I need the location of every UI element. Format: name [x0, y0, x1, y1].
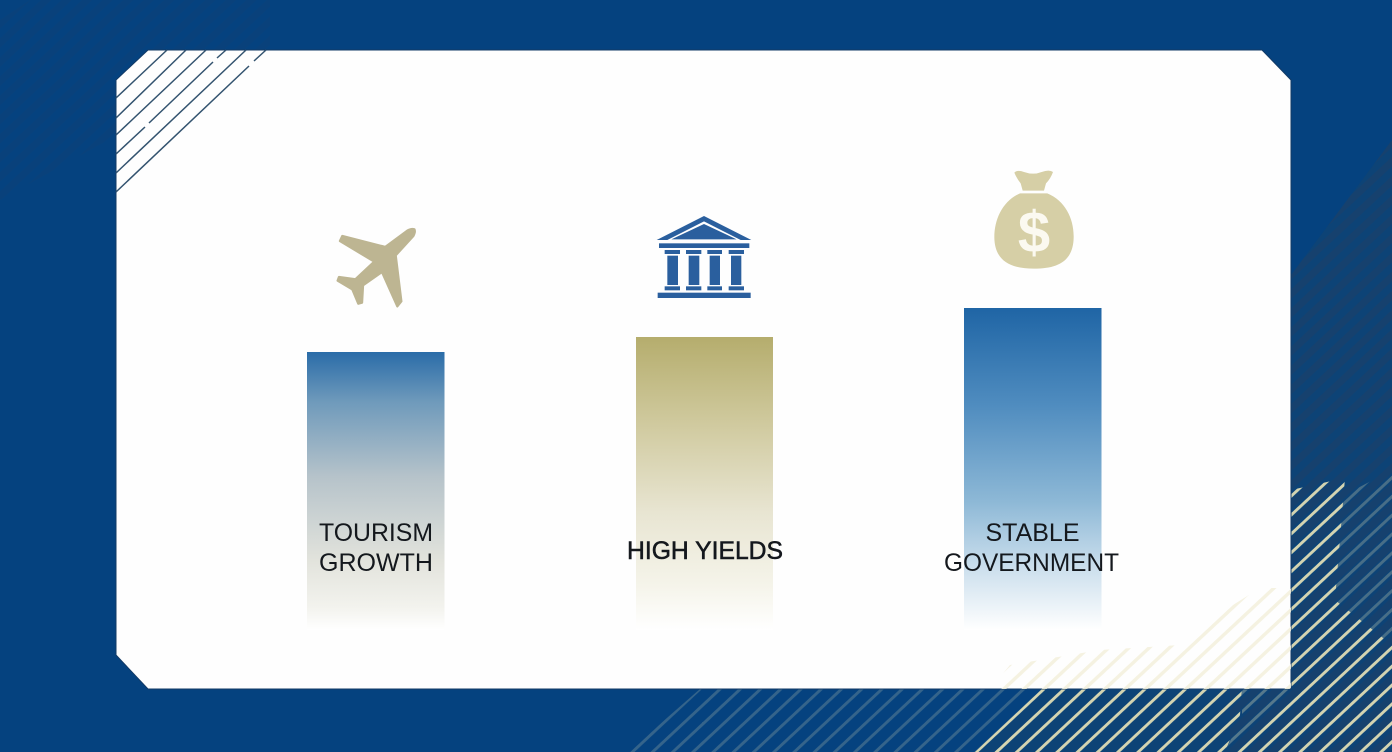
icon: bank building — [657, 216, 751, 298]
white card — [116, 50, 1291, 689]
dim cream stripes right edge — [1335, 470, 1392, 645]
cream stripes bottom — [975, 689, 1242, 752]
label: tourism growth: TOURISM — [319, 519, 433, 547]
icon: money bag: $ — [1018, 200, 1050, 265]
card corner stripes top-left — [116, 50, 266, 192]
icon: airplane — [338, 229, 415, 306]
column: stable government — [944, 171, 1119, 630]
bar: tourism growth — [307, 352, 444, 630]
label: high yields: HIGH YIELDS — [627, 537, 783, 565]
icon: money bag — [994, 171, 1074, 269]
dark stripes right side — [1230, 140, 1392, 752]
bar: stable government — [964, 308, 1102, 630]
column: tourism growth — [307, 229, 444, 630]
column: high yields — [627, 216, 783, 630]
faint dark stripes top-left — [0, 0, 270, 200]
faint stripes below card — [628, 689, 1060, 752]
dark tint right side — [975, 140, 1392, 752]
label: stable government: STABLE — [986, 519, 1080, 547]
cream stripes lower right — [1225, 478, 1392, 752]
dim stripes between bottom and right groups — [1225, 689, 1291, 752]
label: stable government: GOVERNMENT — [944, 549, 1119, 577]
faint cream stripes in card corner — [990, 588, 1291, 689]
bar: high yields — [636, 337, 773, 630]
label: tourism growth: GROWTH — [319, 549, 433, 577]
